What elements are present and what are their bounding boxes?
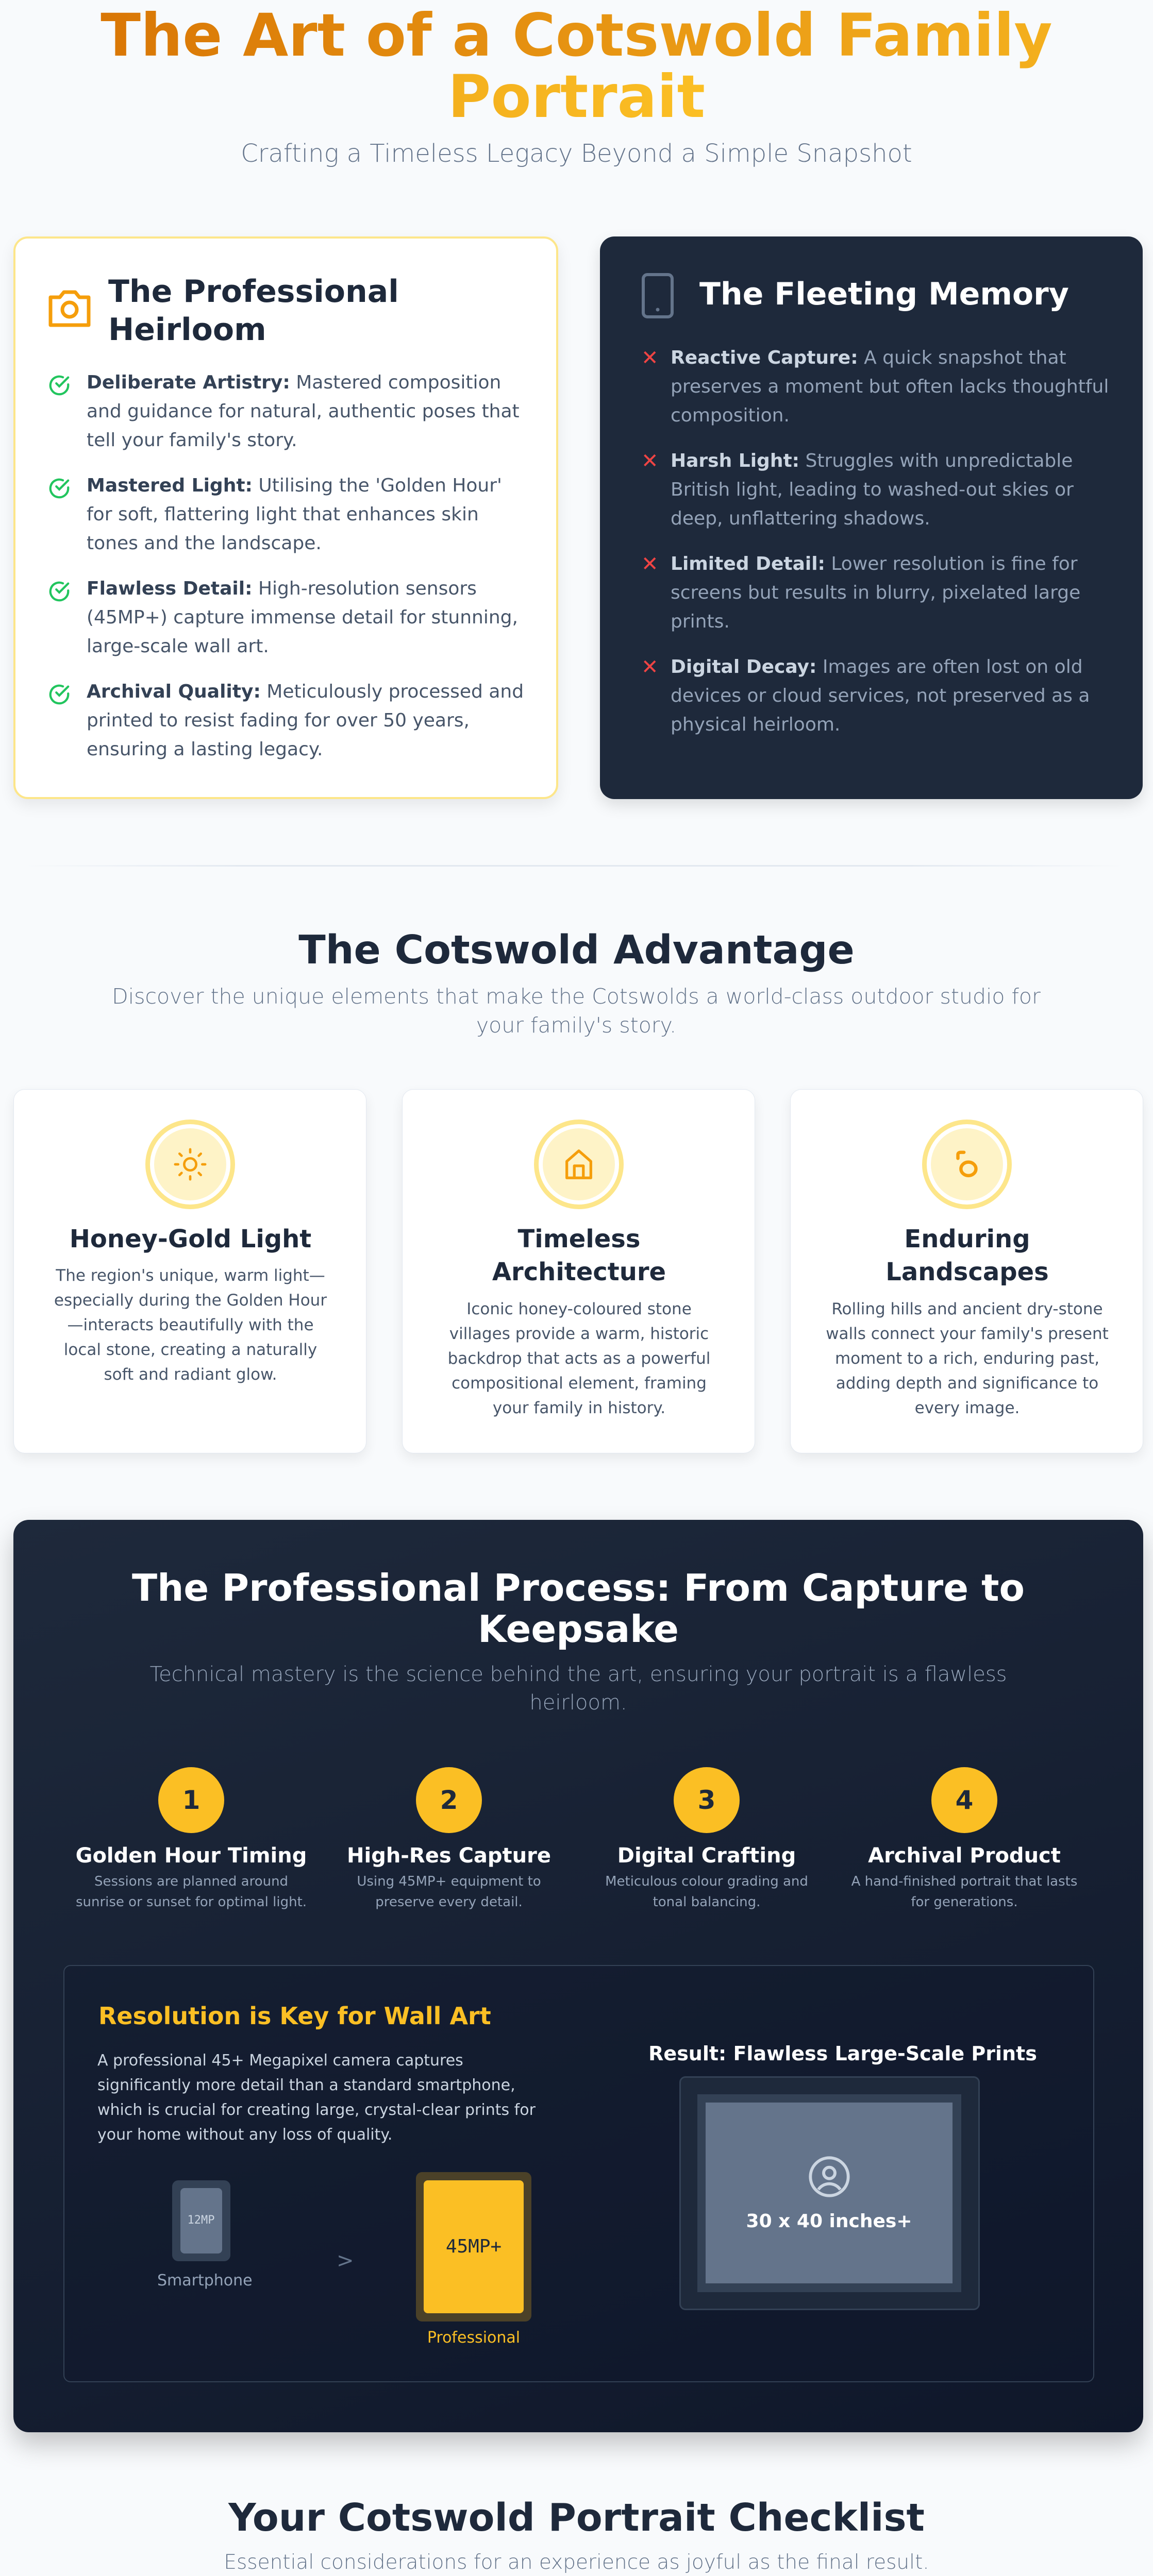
step 1 xyxy=(76,1767,307,1910)
list: drawbacks: Harsh Light: Struggles with unpredictable British light, leading to washed-out skies or deep, unflattering shadows. xyxy=(671,450,1074,529)
step 2: High-Res Capture xyxy=(347,1844,551,1868)
title: Portrait xyxy=(448,62,705,131)
step 4: 4 xyxy=(956,1785,973,1815)
heading: resolution: Resolution is Key for Wall Art xyxy=(98,2002,491,2030)
subtitle: Crafting a Timeless Legacy Beyond a Simple Snapshot xyxy=(241,139,912,168)
list: drawbacks: ✕ xyxy=(641,346,659,370)
panel: resolution comparison xyxy=(63,1965,1094,2382)
heading xyxy=(132,1566,1025,1651)
title xyxy=(101,1,1052,131)
title: Landscapes xyxy=(885,1258,1049,1286)
step 4: A hand-finished portrait that lasts for generations. xyxy=(851,1874,1077,1910)
step 3 xyxy=(605,1767,808,1910)
list: drawbacks: Reactive Capture: A quick snapshot that preserves a moment but often lacks thoughtful composition. xyxy=(671,347,1109,426)
description: Iconic honey-coloured stone villages provide a warm, historic backdrop that acts as a powerful compositional element, framing your family in history. xyxy=(448,1300,710,1417)
step 3: Digital Crafting xyxy=(617,1844,796,1868)
step 2: 2 xyxy=(440,1785,458,1815)
list: drawbacks: Digital Decay: Images are often lost on old devices or cloud services, not preserved as a physical heirloom. xyxy=(671,656,1090,735)
title: Timeless xyxy=(518,1225,640,1253)
panel: professional process xyxy=(13,1520,1143,2432)
arrow: greater than: > xyxy=(337,2249,354,2273)
step 1: Sessions are planned around xyxy=(94,1874,288,1889)
subtitle: advantage: Discover the unique elements that make the Cotswolds a world-class outdoor studio for your family's story. xyxy=(112,984,1041,1038)
heading: cotswold advantage: The Cotswold Advantage xyxy=(298,927,855,973)
list: drawbacks: ✕ xyxy=(641,655,659,679)
framed print illustration: 30 x 40 inches+ xyxy=(746,2211,912,2232)
heading xyxy=(108,274,399,348)
heading: The Professional xyxy=(108,274,399,310)
icon: sun xyxy=(145,1120,235,1209)
step 2: Using 45MP+ equipment to preserve every detail. xyxy=(357,1874,541,1910)
framed print illustration xyxy=(679,2076,980,2310)
description: Rolling hills and ancient dry-stone walls connect your family's present moment to a rich, enduring past, adding depth and significance to every image. xyxy=(826,1300,1109,1417)
card: timeless architecture xyxy=(402,1089,755,1453)
list: benefits: Mastered Light: Utilising the 'Golden Hour' for soft, flattering light that enhances skin tones and the landscape. xyxy=(87,475,502,554)
title: The Art of a Cotswold Family xyxy=(101,1,1052,70)
title: Architecture xyxy=(492,1258,666,1286)
subtitle: checklist: Essential considerations for an experience as joyful as the final result. xyxy=(224,2551,929,2574)
icon: landscape xyxy=(922,1120,1012,1209)
step 1: Golden Hour Timing xyxy=(76,1844,307,1868)
step 1: 1 xyxy=(182,1785,200,1815)
list: benefits: Deliberate Artistry: Mastered composition and guidance for natural, authentic poses that tell your family's story. xyxy=(87,372,520,451)
heading: checklist: Your Cotswold Portrait Checklist xyxy=(228,2496,925,2540)
title: Enduring xyxy=(904,1225,1030,1253)
step 2 xyxy=(347,1767,551,1910)
card: enduring landscapes xyxy=(790,1089,1143,1453)
heading: The Fleeting Memory xyxy=(699,276,1069,312)
panel: professional heirloom xyxy=(13,236,558,799)
title: Honey-Gold Light xyxy=(70,1225,311,1253)
card: honey-gold light xyxy=(13,1089,366,1453)
step 4 xyxy=(851,1767,1077,1910)
heading: result: Result: Flawless Large-Scale Prints xyxy=(648,2042,1037,2065)
icon: professional 45MP xyxy=(416,2172,531,2347)
panel: fleeting memory xyxy=(600,236,1143,799)
list: drawbacks xyxy=(641,346,1109,735)
step 3: 3 xyxy=(698,1785,715,1815)
icon: person xyxy=(809,2156,850,2197)
icon: professional 45MP: 45MP+ xyxy=(446,2236,502,2257)
list: drawbacks: ✕ xyxy=(641,449,659,473)
description: The region's unique, warm light—especially during the Golden Hour —interacts beautifully with the local stone, creating a naturally soft and radiant glow. xyxy=(54,1266,327,1384)
subtitle: Technical mastery is the science behind the art, ensuring your portrait is a flawless heirloom. xyxy=(149,1663,1007,1715)
list: drawbacks: ✕ xyxy=(641,552,659,576)
heading: Heirloom xyxy=(108,312,266,348)
list: benefits: Flawless Detail: High-resolution sensors (45MP+) capture immense detail for stunning, large-scale wall art. xyxy=(87,578,518,657)
list: benefits: Archival Quality: Meticulously processed and printed to resist fading for over 50 years, ensuring a lasting legacy. xyxy=(87,681,524,760)
list: benefits xyxy=(49,372,524,760)
title xyxy=(492,1225,666,1286)
title xyxy=(885,1225,1049,1286)
icon: camera xyxy=(48,291,91,327)
icon: house xyxy=(534,1120,624,1209)
icon: smartphone 12MP xyxy=(157,2180,253,2290)
icon: smartphone 12MP: Smartphone xyxy=(157,2272,253,2290)
step 4: Archival Product xyxy=(868,1844,1061,1868)
step 3: Meticulous colour grading and tonal balancing. xyxy=(605,1874,808,1910)
icon: professional 45MP: Professional xyxy=(427,2329,520,2347)
icon: smartphone 12MP: 12MP xyxy=(188,2214,214,2227)
list: drawbacks: Limited Detail: Lower resolution is fine for screens but results in blurry, pixelated large prints. xyxy=(671,553,1080,632)
heading: Keepsake xyxy=(478,1607,679,1651)
step 1: sunrise or sunset for optimal light. xyxy=(76,1894,307,1910)
paragraph: A professional 45+ Megapixel camera captures significantly more detail than a standard smartphone, which is crucial for creating large, crystal-clear prints for your home without any loss of quality. xyxy=(97,2052,536,2144)
icon: phone xyxy=(642,273,674,318)
heading: The Professional Process: From Capture to xyxy=(132,1566,1025,1609)
